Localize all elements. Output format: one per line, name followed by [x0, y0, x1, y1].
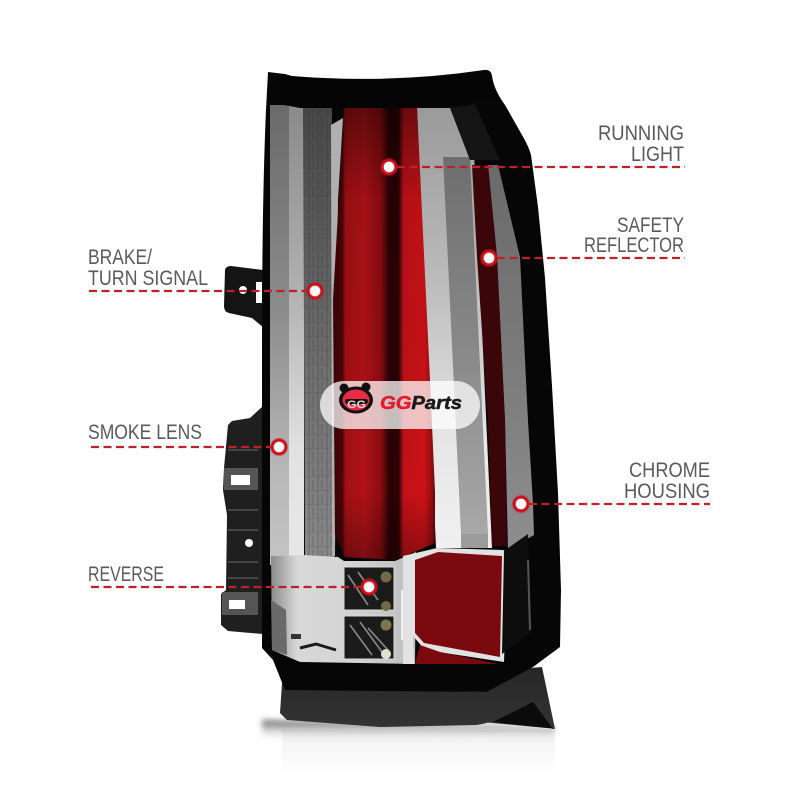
- product reflection: [262, 720, 555, 775]
- safety reflector marker: [480, 248, 498, 268]
- brake marker: [306, 282, 324, 300]
- mounting base: [280, 667, 555, 729]
- brake leader: [89, 290, 308, 292]
- callout: brake and turn signal: [88, 246, 324, 300]
- running light leader: [397, 166, 685, 168]
- logo mascot icon: [339, 382, 373, 414]
- black housing silhouette: [262, 70, 561, 692]
- chrome housing marker: [512, 494, 530, 514]
- logo wordmark: GGParts: [380, 393, 462, 413]
- running light label: RUNNING: [598, 122, 684, 145]
- outer smoke lens strip: [270, 105, 290, 565]
- reverse LED boxes: [344, 567, 394, 659]
- callout: smoke lens: [88, 421, 288, 456]
- running light marker: [380, 158, 398, 176]
- safety reflector label line 2: REFLECTOR: [584, 234, 684, 257]
- smoke lens label: SMOKE LENS: [88, 421, 202, 444]
- brake label: BRAKE/: [88, 246, 152, 269]
- safety reflector label: SAFETY: [617, 214, 684, 237]
- callout: reverse: [88, 563, 378, 596]
- red running light: [333, 108, 435, 560]
- smoke lens leader: [91, 446, 272, 448]
- tail light product: [221, 70, 561, 729]
- chrome label: CHROME: [629, 459, 710, 482]
- reverse leader: [91, 586, 362, 588]
- upper mounting bracket: [224, 266, 264, 328]
- callout: running light: [380, 122, 685, 176]
- turn signal label: TURN SIGNAL: [88, 267, 208, 290]
- inner smoke lens strip: [289, 105, 304, 565]
- housing label: HOUSING: [624, 480, 710, 503]
- logo badge: [320, 381, 480, 429]
- safety reflector leader: [497, 257, 685, 259]
- top black cap: [276, 71, 498, 108]
- chrome lower section: [271, 552, 416, 664]
- upper inner black details: [450, 104, 500, 160]
- right grey lens strip: [488, 165, 534, 550]
- callout: chrome housing: [512, 459, 710, 514]
- chrome housing leader: [529, 503, 710, 505]
- lower mounting bracket: [221, 406, 263, 634]
- white lens edge: [331, 118, 343, 556]
- reverse label: REVERSE: [88, 563, 164, 586]
- reverse marker: [360, 578, 378, 596]
- logo mascot icon: GG: [347, 399, 366, 411]
- brake and turn LED strip: [303, 108, 334, 558]
- smoke lens marker: [270, 438, 288, 456]
- silver reflector: [417, 108, 492, 548]
- running light label line 2: LIGHT: [631, 143, 684, 166]
- callout: safety reflector: [480, 214, 685, 268]
- lower red reflector: [403, 534, 532, 664]
- dark red safety reflector strip: [472, 165, 507, 546]
